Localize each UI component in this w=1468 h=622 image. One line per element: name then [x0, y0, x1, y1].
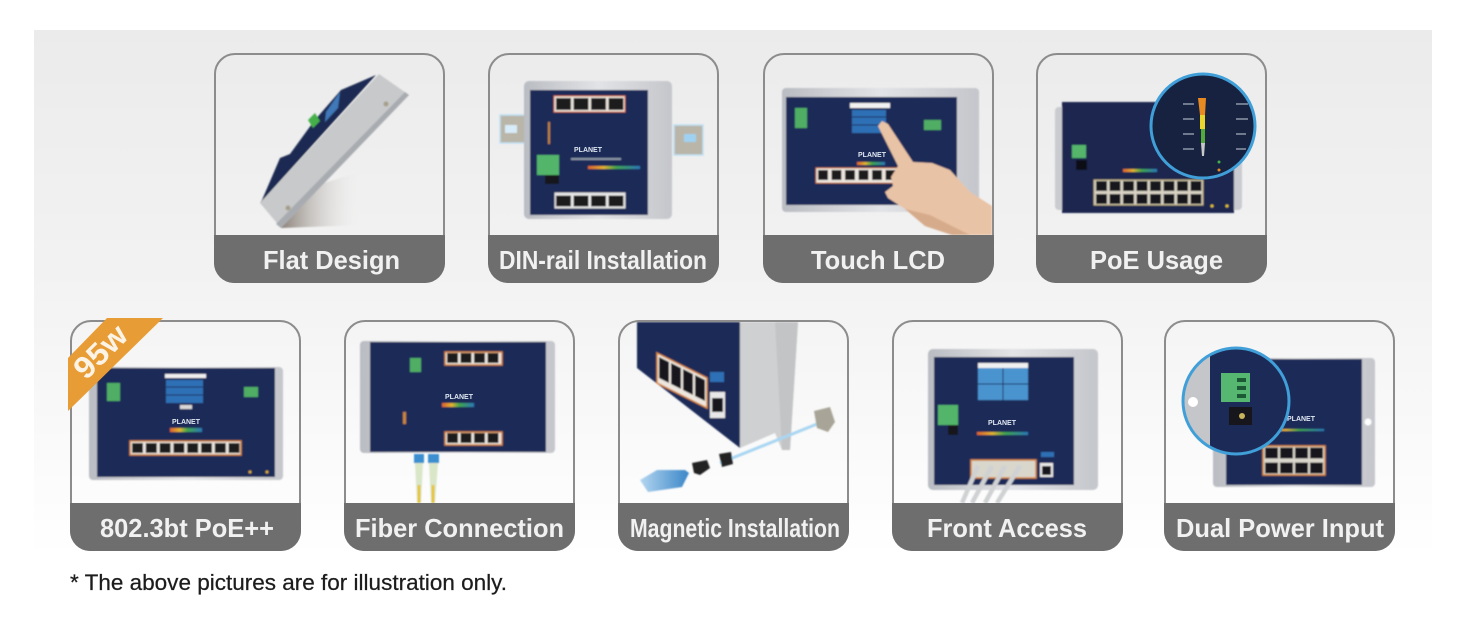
label: Touch LCD	[811, 245, 945, 275]
label: DIN-rail Installation	[499, 245, 707, 275]
frame	[1165, 321, 1394, 550]
badge: 95w ribbon	[66, 317, 163, 411]
label bar	[344, 503, 575, 551]
label: PoE Usage	[1090, 245, 1223, 275]
label bar	[488, 235, 719, 283]
logo: PLANET	[172, 419, 201, 426]
label: Front Access	[927, 513, 1087, 543]
image: 8-port switch	[89, 367, 283, 480]
label: Dual Power Input	[1176, 513, 1384, 543]
label: Fiber Connection	[355, 513, 564, 543]
magnifier: power inputs	[1183, 348, 1289, 454]
label bar	[892, 503, 1123, 551]
label: Flat Design	[263, 245, 400, 275]
footnote: * The above pictures are for illustration only.	[70, 570, 507, 595]
logo: PLANET	[988, 420, 1017, 427]
logo: PLANET	[858, 152, 887, 159]
magnifier: PoE usage meter	[1151, 74, 1255, 178]
frame	[764, 54, 993, 282]
frame	[71, 321, 300, 550]
panel: 802.3bt PoE++	[66, 317, 301, 551]
frame	[215, 54, 444, 282]
panel: Fiber Connection	[344, 321, 575, 551]
image: switch with PoE usage magnifier	[1055, 102, 1242, 213]
frame	[893, 321, 1122, 550]
image: switch with front cables	[928, 349, 1098, 503]
label bar	[1036, 235, 1267, 283]
image: magnet mounting close-up	[637, 322, 835, 492]
frame	[1037, 54, 1266, 282]
logo: PLANET	[574, 147, 603, 154]
frame	[619, 321, 848, 550]
label bar	[70, 503, 301, 551]
panel: Dual Power Input	[1164, 321, 1395, 551]
panel: Flat Design	[214, 54, 445, 283]
panel: PoE Usage	[1036, 54, 1267, 283]
logo: PLANET	[1287, 416, 1316, 423]
image: switch with fiber connectors	[360, 341, 555, 503]
label: Magnetic Installation	[630, 513, 840, 543]
label bar	[618, 503, 849, 551]
image: hand touching LCD	[782, 88, 992, 235]
image: switch rear view	[1213, 358, 1375, 487]
panel: DIN-rail Installation	[488, 54, 719, 283]
panel: Touch LCD	[763, 54, 994, 283]
label bar	[214, 235, 445, 283]
label bar	[1164, 503, 1395, 551]
logo: PLANET	[445, 394, 474, 401]
image: switch on DIN rail	[500, 81, 703, 219]
badge: 95w ribbon: 95w	[66, 317, 135, 386]
label bar	[763, 235, 994, 283]
label: 802.3bt PoE++	[100, 513, 274, 543]
image: angled switch side view	[260, 74, 409, 228]
panel: Front Access	[892, 321, 1123, 551]
frame	[345, 321, 574, 550]
panel: Magnetic Installation	[618, 321, 849, 551]
frame	[489, 54, 718, 282]
